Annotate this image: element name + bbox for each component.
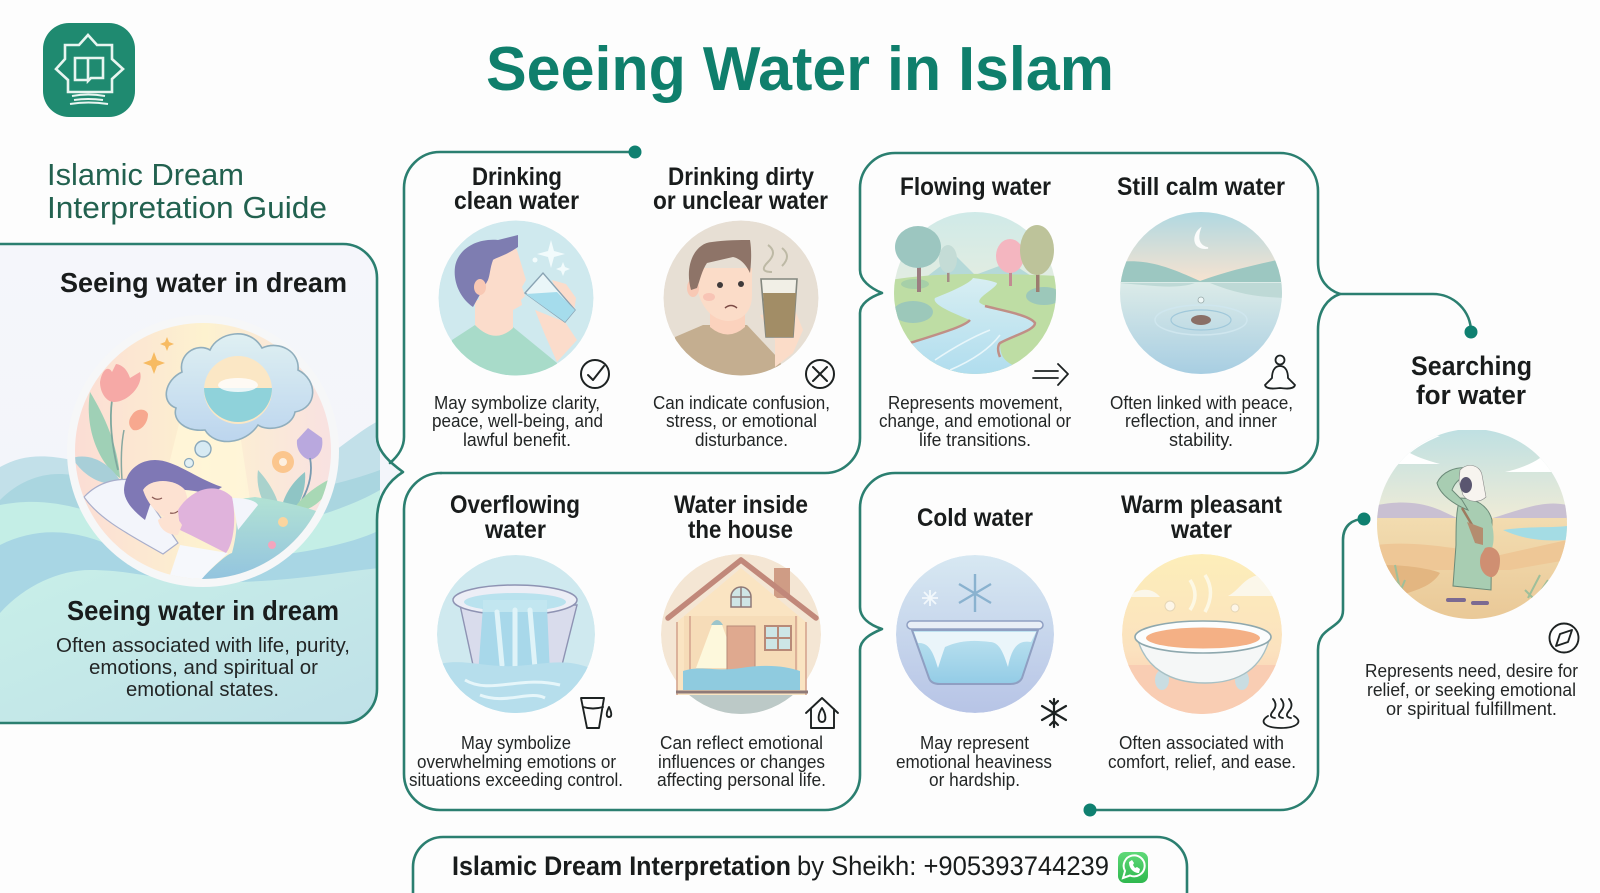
- description: [409, 733, 623, 790]
- heading: or unclear water: [653, 187, 828, 215]
- description: [657, 733, 826, 790]
- description: disturbance.: [695, 430, 788, 450]
- description: [896, 733, 1052, 790]
- panel: cold water: [896, 504, 1066, 790]
- heading: Drinking dirty: [668, 163, 814, 191]
- description: affecting personal life.: [657, 770, 826, 790]
- caption text: Often associated with life, purity,: [56, 635, 350, 657]
- footer text: Islamic Dream Interpretation: [452, 851, 791, 881]
- description: comfort, relief, and ease.: [1108, 752, 1296, 772]
- icon: snowflake: [1042, 699, 1066, 727]
- description: [653, 393, 830, 450]
- heading: the house: [688, 516, 793, 544]
- illustration: woman sleeping and dreaming of water: [67, 315, 340, 590]
- flowers left: [89, 392, 120, 478]
- description: [1110, 393, 1293, 450]
- description: reflection, and inner: [1125, 411, 1277, 431]
- heading: clean water: [454, 187, 579, 215]
- description: Often linked with peace,: [1110, 393, 1293, 413]
- heading: [674, 491, 808, 544]
- icon: steam: [1264, 699, 1298, 728]
- sleeper: [84, 460, 316, 579]
- description: relief, or seeking emotional: [1367, 680, 1576, 700]
- panel: searching for water: [1365, 351, 1578, 719]
- footer bar: [413, 837, 1187, 893]
- heading: [1121, 491, 1283, 544]
- description: [879, 393, 1071, 450]
- flowers right: [297, 428, 322, 460]
- description: influences or changes: [658, 752, 825, 772]
- icon: cup and drop: [581, 698, 611, 728]
- description: stability.: [1169, 430, 1233, 450]
- subtitle: Interpretation Guide: [47, 190, 327, 225]
- panel: flowing water: [879, 173, 1071, 450]
- heading: Flowing water: [900, 173, 1051, 201]
- description: stress, or emotional: [666, 411, 817, 431]
- panel: water inside the house: [657, 491, 838, 790]
- footer text: by Sheikh: +905393744239: [797, 851, 1109, 881]
- subtitle: Islamic Dream: [47, 157, 244, 192]
- icon: check: [581, 360, 609, 388]
- illustration: winding river: [894, 212, 1056, 374]
- caption text: [56, 635, 350, 701]
- caption text: emotions, and spiritual or: [89, 657, 318, 679]
- description: Often associated with: [1119, 733, 1284, 753]
- description: Represents need, desire for: [1365, 661, 1578, 681]
- description: lawful benefit.: [463, 430, 571, 450]
- panel: drinking dirty water: [653, 163, 834, 450]
- heading: water: [484, 516, 546, 544]
- panel: overflowing water: [409, 491, 623, 790]
- illustration: flooded house: [661, 554, 821, 715]
- connector dots: [628, 146, 1478, 816]
- description: or spiritual fulfillment.: [1386, 699, 1557, 719]
- description: [1365, 661, 1578, 719]
- illustration: traveler in desert: [1377, 430, 1567, 628]
- heading: [454, 163, 579, 215]
- icon: house and drop: [806, 698, 838, 728]
- panel: drinking clean water: [432, 163, 609, 450]
- description: Can indicate confusion,: [653, 393, 830, 413]
- description: May symbolize: [461, 733, 571, 753]
- description: Can reflect emotional: [660, 733, 823, 753]
- heading: Still calm water: [1117, 173, 1285, 201]
- heading: [450, 491, 580, 544]
- description: May represent: [920, 733, 1029, 753]
- subtitle: [47, 157, 327, 225]
- heading: [1411, 351, 1532, 410]
- heading: Searching: [1411, 351, 1532, 381]
- description: peace, well-being, and: [432, 411, 603, 431]
- heading: Drinking: [472, 163, 562, 191]
- panel: still calm water: [1110, 173, 1295, 450]
- logo: book in star: [43, 23, 135, 117]
- heading: Overflowing: [450, 491, 580, 519]
- panel: seeing water in dream: [0, 244, 410, 730]
- description: overwhelming emotions or: [417, 752, 616, 772]
- icon: cross: [806, 360, 834, 388]
- illustration: icy tub: [896, 555, 1054, 713]
- icon: arrow: [1033, 364, 1068, 385]
- illustration: overflowing bucket: [430, 555, 595, 720]
- panel background with waves: [0, 244, 410, 730]
- description: [1108, 733, 1296, 772]
- description: May symbolize clarity,: [434, 393, 600, 413]
- description: change, and emotional or: [879, 411, 1071, 431]
- heading: Warm pleasant: [1121, 491, 1283, 519]
- description: situations exceeding control.: [409, 770, 623, 790]
- sparkles: [143, 352, 165, 374]
- illustration: man with dirty glass: [664, 220, 818, 380]
- thought cloud: [166, 334, 313, 468]
- description: Represents movement,: [888, 393, 1063, 413]
- icon: whatsapp: [1118, 852, 1148, 883]
- illustration: man drinking: [438, 220, 594, 380]
- illustration: warm bathtub: [1122, 554, 1282, 715]
- icon: compass: [1550, 624, 1578, 652]
- heading: Cold water: [917, 504, 1033, 532]
- heading: [653, 163, 828, 215]
- heading: Seeing water in dream: [60, 267, 347, 298]
- description: emotional heaviness: [896, 752, 1052, 772]
- icon: meditating person: [1265, 356, 1295, 389]
- caption text: emotional states.: [126, 679, 279, 701]
- illustration: still lake with moon: [1118, 210, 1286, 377]
- heading: Water inside: [674, 491, 808, 519]
- description: or hardship.: [929, 770, 1020, 790]
- description: [432, 393, 603, 450]
- heading: water: [1170, 516, 1232, 544]
- title: Seeing Water in Islam: [486, 35, 1114, 104]
- description: life transitions.: [919, 430, 1031, 450]
- caption heading: Seeing water in dream: [67, 595, 339, 626]
- heading: for water: [1416, 380, 1526, 410]
- connector outlines: [0, 152, 1471, 810]
- panel: warm pleasant water: [1108, 491, 1298, 772]
- footer text: [452, 851, 1109, 881]
